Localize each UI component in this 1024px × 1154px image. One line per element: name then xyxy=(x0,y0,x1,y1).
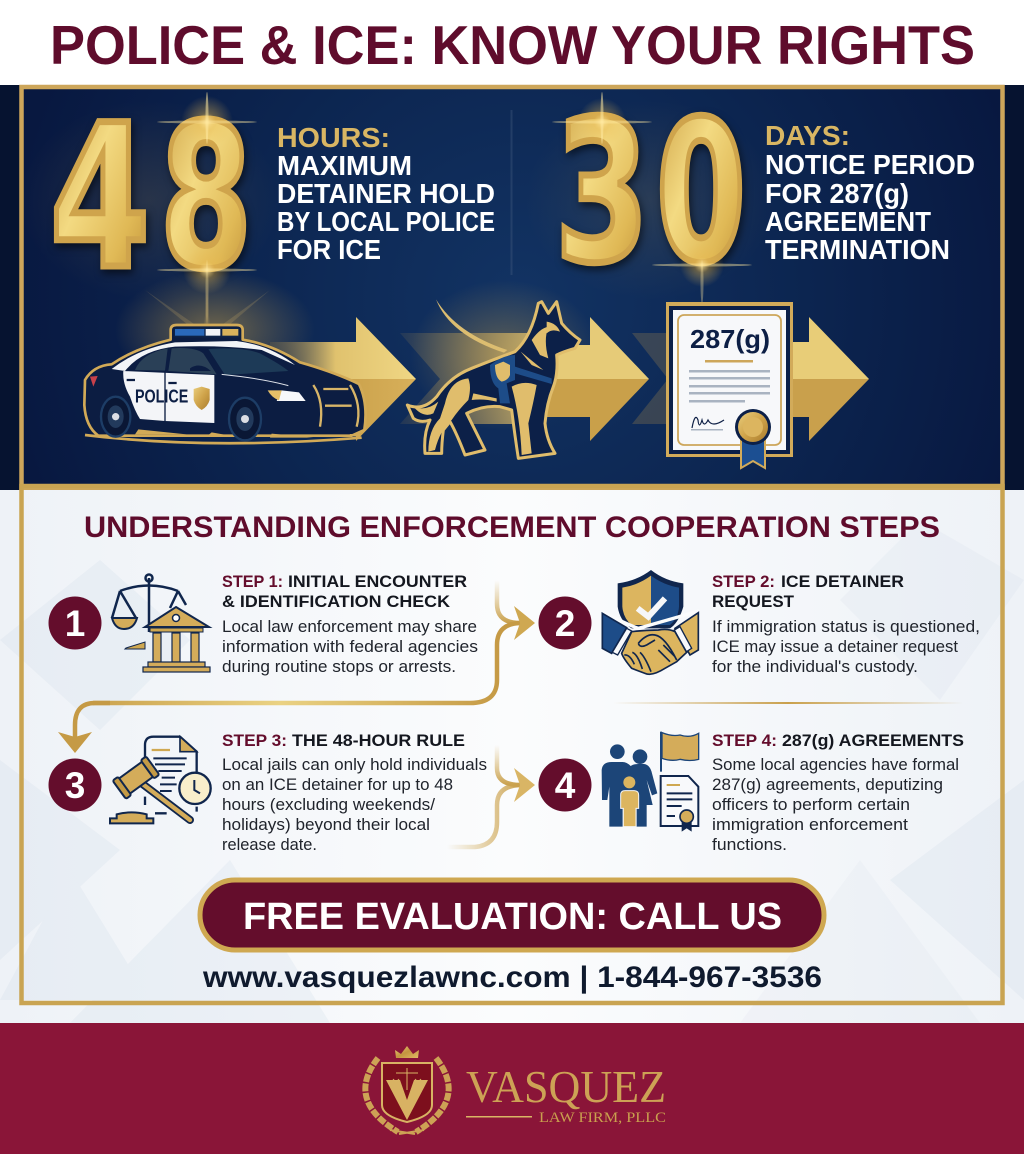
stat: 48 hours xyxy=(20,82,495,324)
step 3 text: hours (excluding weekends/ xyxy=(222,796,435,814)
step 2 text: If immigration status is questioned, xyxy=(712,618,980,636)
icon: scales and courthouse xyxy=(112,574,210,672)
step 1 text: INITIAL ENCOUNTER xyxy=(288,572,467,591)
crown xyxy=(395,1046,419,1058)
harness xyxy=(490,355,552,403)
shield xyxy=(382,1063,432,1122)
headlight xyxy=(277,390,306,401)
step 2 text: for the individual's custody. xyxy=(712,658,918,676)
divider right xyxy=(613,702,963,704)
icon: 287(g) certificate xyxy=(666,302,793,468)
label: 30 days xyxy=(765,120,975,265)
text lines xyxy=(689,370,770,402)
arrow: dog to certificate xyxy=(400,317,649,441)
step 4 text: functions. xyxy=(712,836,787,854)
certificate title: 287(g) xyxy=(690,324,770,354)
badge 2: 2 xyxy=(555,603,575,644)
step 4 text: Some local agencies have formal xyxy=(712,756,959,774)
label: 30 days: AGREEMENT xyxy=(765,206,931,237)
call to action button xyxy=(200,880,824,950)
label: 30 days: NOTICE PERIOD xyxy=(765,149,975,180)
door panel xyxy=(123,371,214,423)
background diamonds xyxy=(0,520,1024,1023)
grille xyxy=(313,385,358,427)
call to action button: FREE EVALUATION: CALL US xyxy=(243,896,782,938)
panel: enforcement cooperation steps xyxy=(0,486,1024,1023)
car badge xyxy=(194,387,210,410)
arrow: car to dog xyxy=(270,317,416,441)
signature xyxy=(692,417,724,428)
step 2 text: REQUEST xyxy=(712,592,795,611)
contact line: www.vasquezlawnc.com | 1-844-967-3536 xyxy=(202,961,822,994)
step 3 text: STEP 3: xyxy=(222,731,287,750)
step 4 text: STEP 4: xyxy=(712,731,777,750)
wheels xyxy=(101,397,261,440)
arrow: certificate onward xyxy=(632,317,869,441)
badge 1 xyxy=(48,596,102,650)
step 3 text: holidays) beyond their local xyxy=(222,816,430,834)
icon: police car xyxy=(84,325,366,443)
badge 1: 1 xyxy=(65,603,85,644)
badge 3 xyxy=(48,758,102,812)
step 2 xyxy=(538,570,980,676)
icon: shield and handshake xyxy=(602,570,699,674)
icon: gavel, document and clock xyxy=(110,737,211,823)
icon: police dog xyxy=(407,299,580,458)
badge 3: 3 xyxy=(65,765,85,806)
light bar xyxy=(174,328,240,338)
icon: family, flag and document xyxy=(602,732,699,832)
number: 48: 4 xyxy=(50,82,150,313)
badge 4 xyxy=(538,758,592,812)
step 4 text: 287(g) AGREEMENTS xyxy=(782,731,964,750)
label: 48 hours xyxy=(277,122,495,265)
step 1 text: information with federal agencies xyxy=(222,638,478,656)
footer band xyxy=(0,1023,1024,1154)
step 4 xyxy=(538,731,964,854)
step 4 text xyxy=(712,731,964,854)
step 3 text xyxy=(222,731,487,854)
label: 48 hours: HOURS: xyxy=(277,122,390,153)
taillight xyxy=(90,376,98,387)
number: 30: 3 xyxy=(555,79,649,306)
label: 48 hours: FOR ICE xyxy=(277,234,381,265)
label: 30 days: FOR 287(g) xyxy=(765,178,909,209)
ground marks xyxy=(135,429,360,438)
roof and windows xyxy=(112,341,295,371)
step 2 text: ICE DETAINER xyxy=(781,572,904,591)
leash xyxy=(436,299,507,353)
step 3 xyxy=(48,731,487,854)
panel: key figures xyxy=(0,79,1024,490)
hood details xyxy=(222,374,288,386)
seal and ribbon xyxy=(735,409,771,468)
step 1 text: Local law enforcement may share xyxy=(222,618,477,636)
number: 48: 8 xyxy=(160,82,252,313)
step 2 text xyxy=(712,572,980,676)
arrow: step 3 to step 4 xyxy=(447,745,535,847)
step 3 text: release date. xyxy=(222,836,317,854)
car label: POLICE xyxy=(135,386,188,407)
step 1 text: STEP 1: xyxy=(222,572,283,591)
wreath xyxy=(365,1058,449,1134)
label: 30 days: DAYS: xyxy=(765,120,850,151)
badge 4: 4 xyxy=(555,765,576,806)
flares on 30 xyxy=(552,92,752,304)
stat: 30 days xyxy=(525,79,975,306)
glow behind car and dog xyxy=(115,270,600,430)
step 3 text: Local jails can only hold individuals xyxy=(222,756,487,774)
arrow: step 2 to step 3 xyxy=(58,703,110,753)
badge 2 xyxy=(538,596,592,650)
number: 48 xyxy=(50,82,252,313)
logo wordmark: VASQUEZ xyxy=(466,1061,666,1112)
step 3 text: THE 48-HOUR RULE xyxy=(292,731,465,750)
dog body xyxy=(407,302,580,458)
step 1 text: & IDENTIFICATION CHECK xyxy=(222,592,451,611)
step 4 text: officers to perform certain xyxy=(712,796,910,814)
gold markings xyxy=(428,322,560,455)
step 4 text: 287(g) agreements, deputizing xyxy=(712,776,943,794)
label: 48 hours: MAXIMUM xyxy=(277,150,412,181)
step 2 text: STEP 2: xyxy=(712,572,775,591)
step 1 xyxy=(48,572,478,676)
step 1 text xyxy=(222,572,478,676)
flares on 48 xyxy=(157,92,257,324)
logo emblem xyxy=(365,1046,449,1134)
label: 48 hours: DETAINER HOLD xyxy=(277,178,495,209)
title: POLICE & ICE: KNOW YOUR RIGHTS xyxy=(50,14,975,76)
label: 30 days: TERMINATION xyxy=(765,234,950,265)
step 1 text: during routine stops or arrests. xyxy=(222,658,456,676)
step 2 text: ICE may issue a detainer request xyxy=(712,638,958,656)
arrow: step 1 to step 2 xyxy=(93,580,535,703)
number: 30: 0 xyxy=(656,79,746,306)
label: 48 hours: BY LOCAL POLICE xyxy=(277,206,495,237)
logo wordmark: LAW FIRM, PLLC xyxy=(539,1110,666,1126)
step 4 text: immigration enforcement xyxy=(712,816,908,834)
step 3 text: on an ICE detainer for up to 48 xyxy=(222,776,453,794)
section heading: UNDERSTANDING ENFORCEMENT COOPERATION STEPS xyxy=(84,511,940,544)
